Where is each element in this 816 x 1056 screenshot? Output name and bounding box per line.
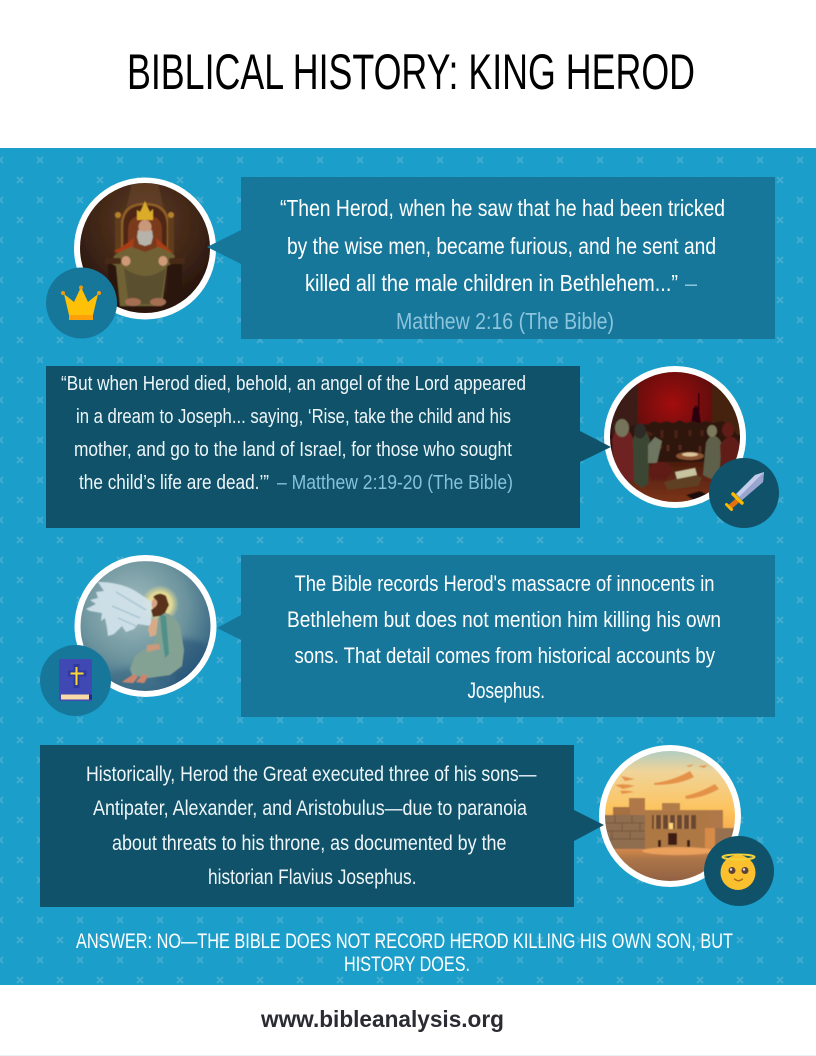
panel: Bible vs Josephus note xyxy=(40,555,775,717)
icon: sword xyxy=(709,458,779,528)
quote text: mother, and go to the land of Israel, for those who sought xyxy=(74,439,512,461)
conclusion answer text xyxy=(76,930,733,976)
note text xyxy=(287,571,721,703)
pointer xyxy=(574,810,604,841)
pointer xyxy=(217,615,241,640)
note text: Historically, Herod the Great executed three of his sons— xyxy=(86,763,536,786)
note box xyxy=(40,745,574,907)
conclusion answer text: HISTORY DOES. xyxy=(344,953,470,976)
note text: The Bible records Herod's massacre of innocents in xyxy=(294,571,714,596)
quote text: – xyxy=(685,270,697,296)
pointer xyxy=(207,230,241,264)
quote text: killed all the male children in Bethlehem...” xyxy=(305,270,678,296)
note text: sons. That detail comes from historical accounts by xyxy=(294,643,715,668)
portrait: angel and praying man xyxy=(74,555,219,697)
portrait: mourning crowd in red hall xyxy=(604,366,746,508)
quote box xyxy=(241,177,775,339)
note text: Bethlehem but does not mention him killing his own xyxy=(287,607,721,632)
note text: historian Flavius Josephus. xyxy=(208,866,416,889)
note text xyxy=(86,763,536,889)
panel: Josephus history note xyxy=(40,745,774,907)
patterned blue background panel xyxy=(0,148,816,985)
icon: Bible xyxy=(40,645,111,716)
note text: about threats to his throne, as documented by the xyxy=(112,832,506,855)
icon: angel face xyxy=(704,836,774,906)
quote text: the child’s life are dead.’” xyxy=(79,472,269,494)
note box xyxy=(241,555,775,717)
note text: Antipater, Alexander, and Aristobulus—due to paranoia xyxy=(93,797,527,820)
icon: crown xyxy=(46,268,117,338)
quote text: by the wise men, became furious, and he sent and xyxy=(287,233,716,259)
portrait: desert palace at sunset xyxy=(599,745,741,887)
pointer xyxy=(580,431,611,462)
portrait: Herod on throne xyxy=(74,178,216,320)
quote text: – Matthew 2:19-20 (The Bible) xyxy=(277,472,513,494)
quote text: Matthew 2:16 (The Bible) xyxy=(396,308,614,334)
quote text: “But when Herod died, behold, an angel of the Lord appeared xyxy=(61,373,526,395)
quote box xyxy=(46,366,580,528)
panel: Matthew 2:19-20 quote xyxy=(46,366,779,528)
quote text xyxy=(61,373,526,494)
quote text xyxy=(280,195,725,334)
quote text: “Then Herod, when he saw that he had been tricked xyxy=(280,195,725,221)
footer website: www.bibleanalysis.org xyxy=(260,1006,504,1032)
panel: Matthew 2:16 quote xyxy=(46,177,775,339)
note text: Josephus. xyxy=(468,678,545,703)
quote text: in a dream to Joseph... saying, ‘Rise, take the child and his xyxy=(76,406,511,428)
